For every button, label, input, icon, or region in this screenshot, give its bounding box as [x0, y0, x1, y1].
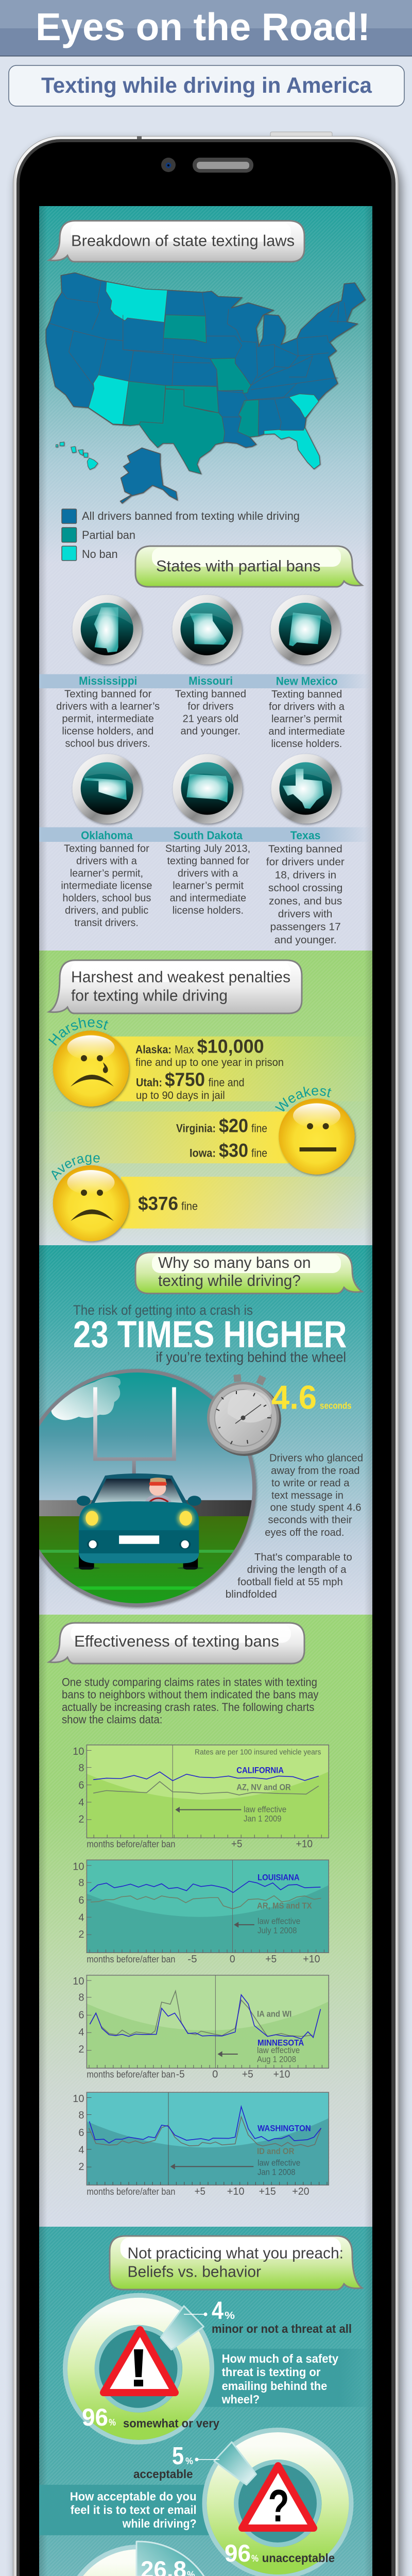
bubble: harshest and weakest penalties: Harshest and weakest penalties: [71, 968, 290, 986]
stat: 4 percent minor: [184, 2297, 352, 2335]
26.8 percent wedge: [136, 2541, 217, 2576]
Weakest text block: fine: [251, 1122, 267, 1135]
icon: South Dakota: [173, 754, 242, 823]
chart: Washington: 2: [78, 2161, 84, 2173]
text: Mississippi ban: [56, 688, 160, 749]
chart: California: +5: [231, 1839, 242, 1850]
chart: Louisiana: +10: [303, 1954, 320, 1965]
state: South Carolina: [289, 394, 319, 418]
text: Texas ban: zones, and bus: [269, 895, 342, 907]
chart: Washington: +15: [259, 2186, 276, 2197]
stat: 5 percent acceptable: acceptable: [133, 2467, 193, 2481]
Average text block: fine: [181, 1200, 198, 1213]
bubble: why so many bans: texting while driving?: [158, 1272, 301, 1290]
chart: Washington: law effective: [258, 2158, 300, 2168]
donut: sent email or text: [65, 2541, 217, 2576]
Harshest text block: up to 90 days in jail: [136, 1090, 225, 1101]
bubble: harshest and weakest penalties: [49, 960, 302, 1013]
chart: Louisiana: 0: [230, 1954, 235, 1965]
bubble: states with partial bans: States with partial bans: [156, 557, 320, 575]
Harshest text block: Alaska:: [135, 1043, 171, 1056]
chart: Washington: 8: [78, 2110, 84, 2121]
label: Average: [52, 1155, 100, 1181]
chart: Minnesota: months before/after ban: [87, 2070, 175, 2080]
stat: 96 percent somewhat or very: [82, 2403, 219, 2431]
text: comparable to blindfolded: football field at 55 mph: [237, 1577, 343, 1588]
stat: 4.6 seconds: 4.6: [271, 1379, 317, 1416]
Alaska: [121, 448, 177, 503]
icon: warning exclamation: [104, 2330, 175, 2393]
text: Oklahoma ban: Texting banned for: [64, 843, 149, 854]
text: Missouri ban: and younger.: [180, 725, 241, 737]
question: acceptability: feel it is to text or email: [71, 2503, 197, 2517]
text: Texas ban: Texting banned: [268, 843, 342, 855]
smiley: sad: [53, 1165, 129, 1241]
text: drivers who glanced: eyes off the road.: [265, 1527, 344, 1538]
icon: stopwatch: [207, 1374, 281, 1456]
chart: Louisiana: July 1 2008: [258, 1926, 297, 1936]
Hawaii: [56, 442, 98, 469]
subtitle pill: Texting while driving in America: [41, 73, 372, 98]
chart: California: 4: [78, 1797, 84, 1808]
Harshest text block: $750: [165, 1069, 205, 1090]
Harshest text block: [135, 1036, 284, 1101]
question: safety threat: wheel?: [221, 2393, 260, 2406]
text: Oklahoma ban: intermediate license: [61, 880, 152, 892]
text: comparable to blindfolded: [226, 1552, 352, 1600]
harshest panel: [48, 1018, 348, 1109]
crash risk headline: 23 TIMES HIGHER: [73, 1314, 347, 1355]
Weakest text block: fine: [251, 1147, 267, 1160]
chart: Minnesota: IA and WI: [257, 2009, 291, 2019]
map legend: [62, 509, 300, 561]
icon: Mississippi: [72, 595, 142, 665]
text: Mississippi ban: school bus drivers.: [65, 738, 150, 749]
chart: Louisiana: 6: [78, 1895, 84, 1906]
state names band row 2: [39, 827, 372, 842]
stat: 5 percent acceptable: 5: [172, 2443, 184, 2470]
text: South Dakota ban: learner’s permit: [173, 880, 244, 892]
label: Weakest: Weakest: [275, 1087, 332, 1112]
bubble: breakdown of state texting laws: [49, 221, 304, 262]
bubble: not practicing what you preach: Not practicing what you preach:: [128, 2244, 344, 2262]
label: Harshest: Harshest: [48, 1018, 108, 1046]
chart: California: months before/after ban: [87, 1839, 175, 1850]
icon: warning question: ?: [268, 2480, 289, 2531]
chart: Washington: +5: [195, 2186, 205, 2197]
stat: 96 percent unacceptable: [225, 2539, 335, 2567]
chart: Minnesota: 2: [78, 2044, 84, 2055]
text: Mississippi ban: permit, intermediate: [62, 713, 154, 724]
crash risk headline: if you’re texting behind the wheel: [156, 1349, 346, 1365]
text: Texas ban: school crossing: [268, 883, 342, 894]
section backgrounds: [39, 206, 372, 2576]
state: Mississippi: [238, 400, 259, 437]
chart: California: 6: [78, 1780, 84, 1791]
text: study intro: bans to neighbors without them indicated the bans may: [62, 1688, 318, 1701]
text: South Dakota ban: texting banned for: [167, 856, 249, 867]
stat: 96 percent somewhat or very: %: [109, 2417, 116, 2428]
chart: Louisiana: 2: [78, 1929, 84, 1940]
state: New Mexico: [123, 381, 165, 426]
chart: California: CALIFORNIA: [236, 1766, 284, 1775]
stat: 96 percent unacceptable: %: [251, 2553, 259, 2564]
state names band row 2: Texas: [290, 829, 320, 842]
chart: Minnesota: 10: [73, 1976, 84, 1987]
stat: 4.6 seconds: seconds: [320, 1401, 352, 1411]
stat: 4 percent minor: %: [225, 2310, 235, 2321]
text: Missouri ban: [175, 688, 246, 737]
text: South Dakota ban: Starting July 2013,: [165, 843, 250, 854]
text: Mississippi ban: Texting banned for: [64, 688, 152, 700]
text: drivers who glanced: to write or read a: [271, 1478, 350, 1489]
text: drivers who glanced: away from the road: [271, 1465, 359, 1477]
text: New Mexico ban: for drivers with a: [269, 701, 345, 713]
icon: Texas: [271, 754, 341, 823]
average panel: [52, 1155, 358, 1244]
Weakest text block: Iowa:: [190, 1147, 216, 1160]
chart: Washington: +20: [292, 2186, 309, 2197]
stat: 96 percent unacceptable: unacceptable: [262, 2551, 335, 2565]
speaker: [193, 158, 253, 173]
chart: Minnesota: 8: [78, 1992, 84, 2004]
chart: Minnesota: 6: [78, 2010, 84, 2021]
illustration: car in mirror with goalpost: [39, 1368, 258, 1609]
text: New Mexico ban: learner’s permit: [271, 714, 342, 725]
text: drivers who glanced: text message in: [271, 1490, 344, 1501]
chart: Minnesota: 0: [212, 2069, 218, 2080]
state: Arizona: [89, 375, 129, 425]
chart: Minnesota: -5: [176, 2069, 185, 2080]
chart: Washington: [73, 2092, 329, 2197]
driver: [145, 1495, 171, 1502]
chart: California: Jan 1 2009: [244, 1814, 281, 1824]
text: South Dakota ban: license holders.: [173, 905, 244, 916]
text: Texas ban: and younger.: [274, 935, 337, 946]
bubble: effectiveness of texting bans: [49, 1623, 304, 1664]
question: safety threat: How much of a safety: [222, 2352, 338, 2365]
state names band row 2: Oklahoma: [81, 829, 133, 842]
text: Missouri ban: Texting banned: [175, 688, 246, 700]
state: South Dakota: [163, 315, 207, 343]
5 percent wedge: [214, 2442, 256, 2485]
state: Oklahoma: [165, 385, 218, 413]
text: South Dakota ban: drivers with a: [178, 868, 238, 879]
chart: Minnesota: [73, 1975, 329, 2080]
text: Mississippi ban: license holders, and: [62, 725, 153, 737]
chart: Washington: months before/after ban: [87, 2187, 175, 2197]
chart: Minnesota: +10: [273, 2069, 290, 2080]
state: Florida: [264, 428, 320, 469]
text: New Mexico ban: Texting banned: [271, 689, 342, 700]
chart: Washington: ID and OR: [257, 2146, 294, 2156]
bubble: not practicing what you preach: Beliefs vs. behavior: [128, 2263, 261, 2281]
text: Oklahoma ban: drivers, and public: [65, 905, 148, 916]
chart: Washington: +10: [227, 2186, 244, 2197]
question band 2: [39, 2485, 209, 2535]
state names band row 1: Mississippi: [79, 674, 137, 687]
text: Texas ban: drivers with: [278, 908, 332, 920]
state: Missouri: [210, 358, 251, 393]
Average text block: $376: [138, 1193, 178, 1214]
state names band row 1: Missouri: [188, 674, 233, 687]
text: New Mexico ban: and intermediate: [268, 726, 345, 737]
smiley: neutral: [279, 1098, 355, 1175]
Harshest text block: Utah:: [136, 1076, 162, 1089]
text: Texas ban: 18, drivers in: [275, 870, 336, 881]
stat: 96 percent somewhat or very: 96: [82, 2403, 108, 2431]
bubble: effectiveness of texting bans: Effectiveness of texting bans: [74, 1632, 279, 1650]
icon: Missouri: [172, 595, 242, 665]
state borders: [50, 280, 347, 430]
chart: Minnesota: Aug 1 2008: [257, 2054, 296, 2064]
chart: Louisiana: -5: [187, 1954, 197, 1965]
stat: 4.6 seconds: [271, 1379, 352, 1416]
chart: California: law effective: [244, 1805, 286, 1815]
chart: Louisiana: [73, 1860, 329, 1965]
state icons row 2: [72, 754, 341, 823]
text: South Dakota ban: [165, 843, 250, 916]
bubble: why so many bans: Why so many bans on: [158, 1253, 311, 1272]
icon: Oklahoma: [72, 754, 142, 823]
stat: 96 percent unacceptable: 96: [225, 2539, 251, 2567]
contiguous states: [46, 273, 365, 474]
Harshest text block: $10,000: [197, 1036, 264, 1057]
stat: 4 percent minor: minor or not a threat at all: [212, 2322, 352, 2335]
text: Oklahoma ban: [61, 843, 152, 929]
state: Texas: [139, 389, 225, 474]
Weakest text block: $20: [219, 1115, 248, 1137]
header band: [0, 0, 412, 57]
text: comparable to blindfolded: driving the length of a: [247, 1564, 347, 1575]
camera: [161, 158, 176, 172]
Weakest text block: Virginia:: [176, 1122, 216, 1135]
chart: California: Rates are per 100 insured vehicle years: [195, 1748, 321, 1756]
car: [74, 1473, 203, 1570]
question band 1: [205, 2349, 372, 2407]
stat: 4 percent minor: 4: [212, 2297, 224, 2325]
text: study intro: show the claims data:: [62, 1713, 162, 1726]
map legend: No ban: [82, 548, 118, 561]
US map: [46, 273, 365, 503]
text: Oklahoma ban: learner’s permit,: [70, 868, 143, 879]
Harshest text block: fine and up to one year in prison: [135, 1057, 284, 1069]
chart: Minnesota: 4: [78, 2027, 84, 2038]
chart: Minnesota: MINNESOTA: [258, 2038, 304, 2048]
chart: California: AZ, NV and OR: [236, 1783, 291, 1792]
question: acceptability: [70, 2489, 197, 2530]
chart: Washington: Jan 1 2008: [258, 2167, 296, 2177]
chart: Louisiana: LOUISIANA: [258, 1872, 300, 1882]
chart: Louisiana: law effective: [258, 1917, 300, 1926]
subtitle pill: [9, 65, 404, 106]
chart: Louisiana: +5: [265, 1954, 277, 1965]
text: drivers who glanced: Drivers who glanced: [269, 1453, 363, 1464]
text: Mississippi ban: drivers with a learner’s: [56, 701, 160, 712]
stat: 96 percent somewhat or very: somewhat or very: [123, 2416, 219, 2430]
text: drivers who glanced: one study spent 4.6: [270, 1502, 362, 1514]
question: acceptability: while driving?: [122, 2517, 197, 2530]
text: Texas ban: passengers 17: [270, 922, 341, 933]
chart: California: +10: [296, 1839, 313, 1850]
Harshest text block: fine and: [209, 1076, 244, 1089]
text: Oklahoma ban: transit drivers.: [74, 918, 139, 929]
Harshest text block: Max: [175, 1043, 194, 1056]
bubble: breakdown of state texting laws: Breakdown of state texting laws: [71, 232, 295, 249]
chart: California: [73, 1745, 329, 1850]
top button: [270, 132, 332, 137]
question: safety threat: emailing behind the: [222, 2379, 327, 2393]
state names band row 1: [39, 674, 372, 688]
field lines: [40, 1550, 234, 1553]
icon: warning question: [242, 2466, 314, 2531]
chart: Minnesota: +5: [242, 2069, 253, 2080]
cloud: [51, 1377, 121, 1420]
chart: Minnesota: law effective: [257, 2045, 300, 2055]
title: Eyes on the Road!: [36, 5, 370, 48]
text: Missouri ban: 21 years old: [183, 713, 238, 724]
state names band row 1: New Mexico: [276, 674, 338, 687]
Weakest text block: $30: [219, 1140, 248, 1161]
map legend: All drivers banned from texting while driving: [82, 510, 300, 522]
bubble: why so many bans: [135, 1252, 362, 1294]
icon: New Mexico: [271, 595, 340, 665]
chart: Washington: 4: [78, 2145, 84, 2156]
stat: 5 percent acceptable: [133, 2443, 219, 2481]
chart: California: 2: [78, 1814, 84, 1825]
text: study intro: [62, 1676, 318, 1726]
crash risk headline: [73, 1302, 347, 1365]
text: Texas ban: [266, 843, 345, 946]
Weakest text block: [176, 1115, 267, 1161]
chart: Louisiana: months before/after ban: [87, 1954, 175, 1964]
text: study intro: One study comparing claims rates in states with texting: [62, 1676, 317, 1689]
donut: safety threat: [65, 2295, 212, 2442]
state icons row 1: [72, 595, 340, 665]
text: Oklahoma ban: drivers with a: [76, 856, 138, 867]
weakest panel: [58, 1087, 357, 1177]
text: drivers who glanced: [265, 1453, 363, 1538]
4 percent wedge: [161, 2306, 203, 2350]
text: New Mexico ban: license holders.: [271, 738, 342, 750]
chart: California: 10: [73, 1746, 84, 1757]
map legend: Partial ban: [82, 529, 135, 541]
chart: Washington: 10: [73, 2093, 84, 2105]
chart: Louisiana: AR, MS and TX: [257, 1901, 312, 1910]
state: Montana: [106, 282, 167, 323]
label: Average: Average: [52, 1155, 100, 1181]
chart: Louisiana: 10: [73, 1861, 84, 1872]
chart: Louisiana: 4: [78, 1912, 84, 1924]
bubble: not practicing what you preach: [110, 2236, 362, 2290]
text: Oklahoma ban: holders, school bus: [62, 892, 151, 904]
donut: acceptability: [204, 2430, 351, 2576]
text: drivers who glanced: seconds with their: [268, 1515, 352, 1526]
chart: Louisiana: 8: [78, 1877, 84, 1889]
goal post: [93, 1387, 176, 1475]
chart: Washington: WASHINGTON: [258, 2124, 311, 2133]
bubble: states with partial bans: [135, 546, 362, 587]
stat: 5 percent acceptable: %: [185, 2456, 193, 2466]
text: study intro: actually be increasing crash rates. The following charts: [62, 1701, 314, 1714]
question: acceptability: How acceptable do you: [70, 2489, 197, 2503]
text: Texas ban: for drivers under: [266, 857, 345, 868]
state names band row 2: South Dakota: [174, 829, 243, 842]
question: safety threat: threat is texting or: [222, 2365, 320, 2379]
text: Missouri ban: for drivers: [187, 701, 234, 712]
smiley: sad with tear: [53, 1030, 129, 1107]
text: New Mexico ban: [268, 689, 345, 750]
chart: California: 8: [78, 1762, 84, 1774]
text: comparable to blindfolded: blindfolded: [226, 1589, 277, 1600]
chart: Washington: 6: [78, 2127, 84, 2139]
crash risk headline: The risk of getting into a crash is: [73, 1302, 253, 1318]
question: safety threat: [221, 2352, 338, 2406]
bubble: harshest and weakest penalties: for texting while driving: [71, 986, 228, 1005]
text: South Dakota ban: and intermediate: [170, 892, 246, 904]
text: comparable to blindfolded: That's comparable to: [254, 1552, 352, 1563]
